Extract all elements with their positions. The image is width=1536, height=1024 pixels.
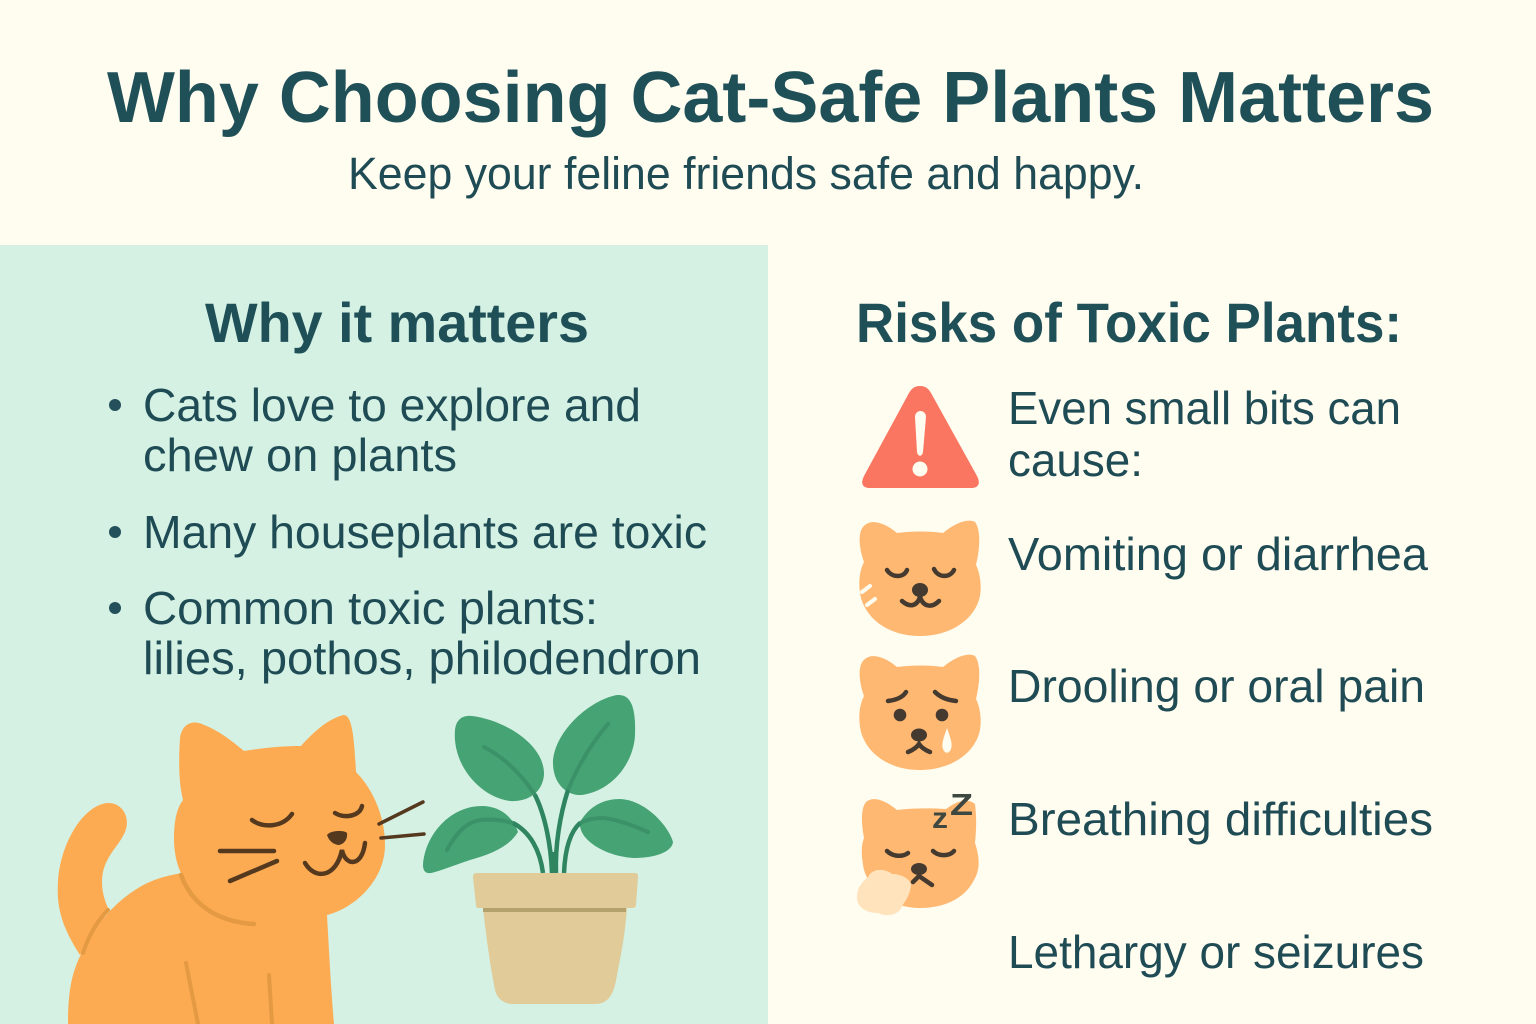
subtitle: Keep your feline friends safe and happy. <box>348 148 1144 199</box>
icon: cat crying <box>859 655 981 770</box>
illustration: cat sniffing <box>58 715 424 1024</box>
bullet list: Common toxic plants: <box>143 582 598 634</box>
text: vomiting or diarrhea: Vomiting or diarrhea <box>1008 528 1428 580</box>
risk 1: even small bits text <box>1008 382 1401 486</box>
heading: risks of toxic plants: Risks of Toxic Plants: <box>856 291 1402 354</box>
heading: why it matters: Why it matters <box>205 291 589 354</box>
risk 1: even small bits text: cause: <box>1008 434 1143 486</box>
bullet list: lilies, pothos, philodendron <box>143 632 701 684</box>
title: Why Choosing Cat-Safe Plants Matters <box>107 58 1434 138</box>
bullet list <box>109 379 707 684</box>
illustration: potted plant <box>423 695 673 1004</box>
panel: why it matters <box>0 245 768 1024</box>
risk 1: even small bits text: Even small bits can <box>1008 382 1401 434</box>
icon: cat sleeping with zzz and breath puff <box>857 787 979 915</box>
icon: cat sleeping with zzz and breath puff: z <box>932 802 948 835</box>
icon: warning triangle <box>862 386 979 488</box>
icon: cat sleeping with zzz and breath puff: Z <box>950 787 973 822</box>
icon: cat vomiting <box>859 521 981 636</box>
bullet list: chew on plants <box>143 429 457 481</box>
bullet list: Many houseplants are toxic <box>143 506 707 558</box>
text: lethargy or seizures: Lethargy or seizures <box>1008 926 1424 978</box>
text: drooling or oral pain: Drooling or oral pain <box>1008 660 1425 712</box>
bullet list: Cats love to explore and <box>143 379 641 431</box>
text: breathing difficulties: Breathing difficulties <box>1008 793 1433 845</box>
